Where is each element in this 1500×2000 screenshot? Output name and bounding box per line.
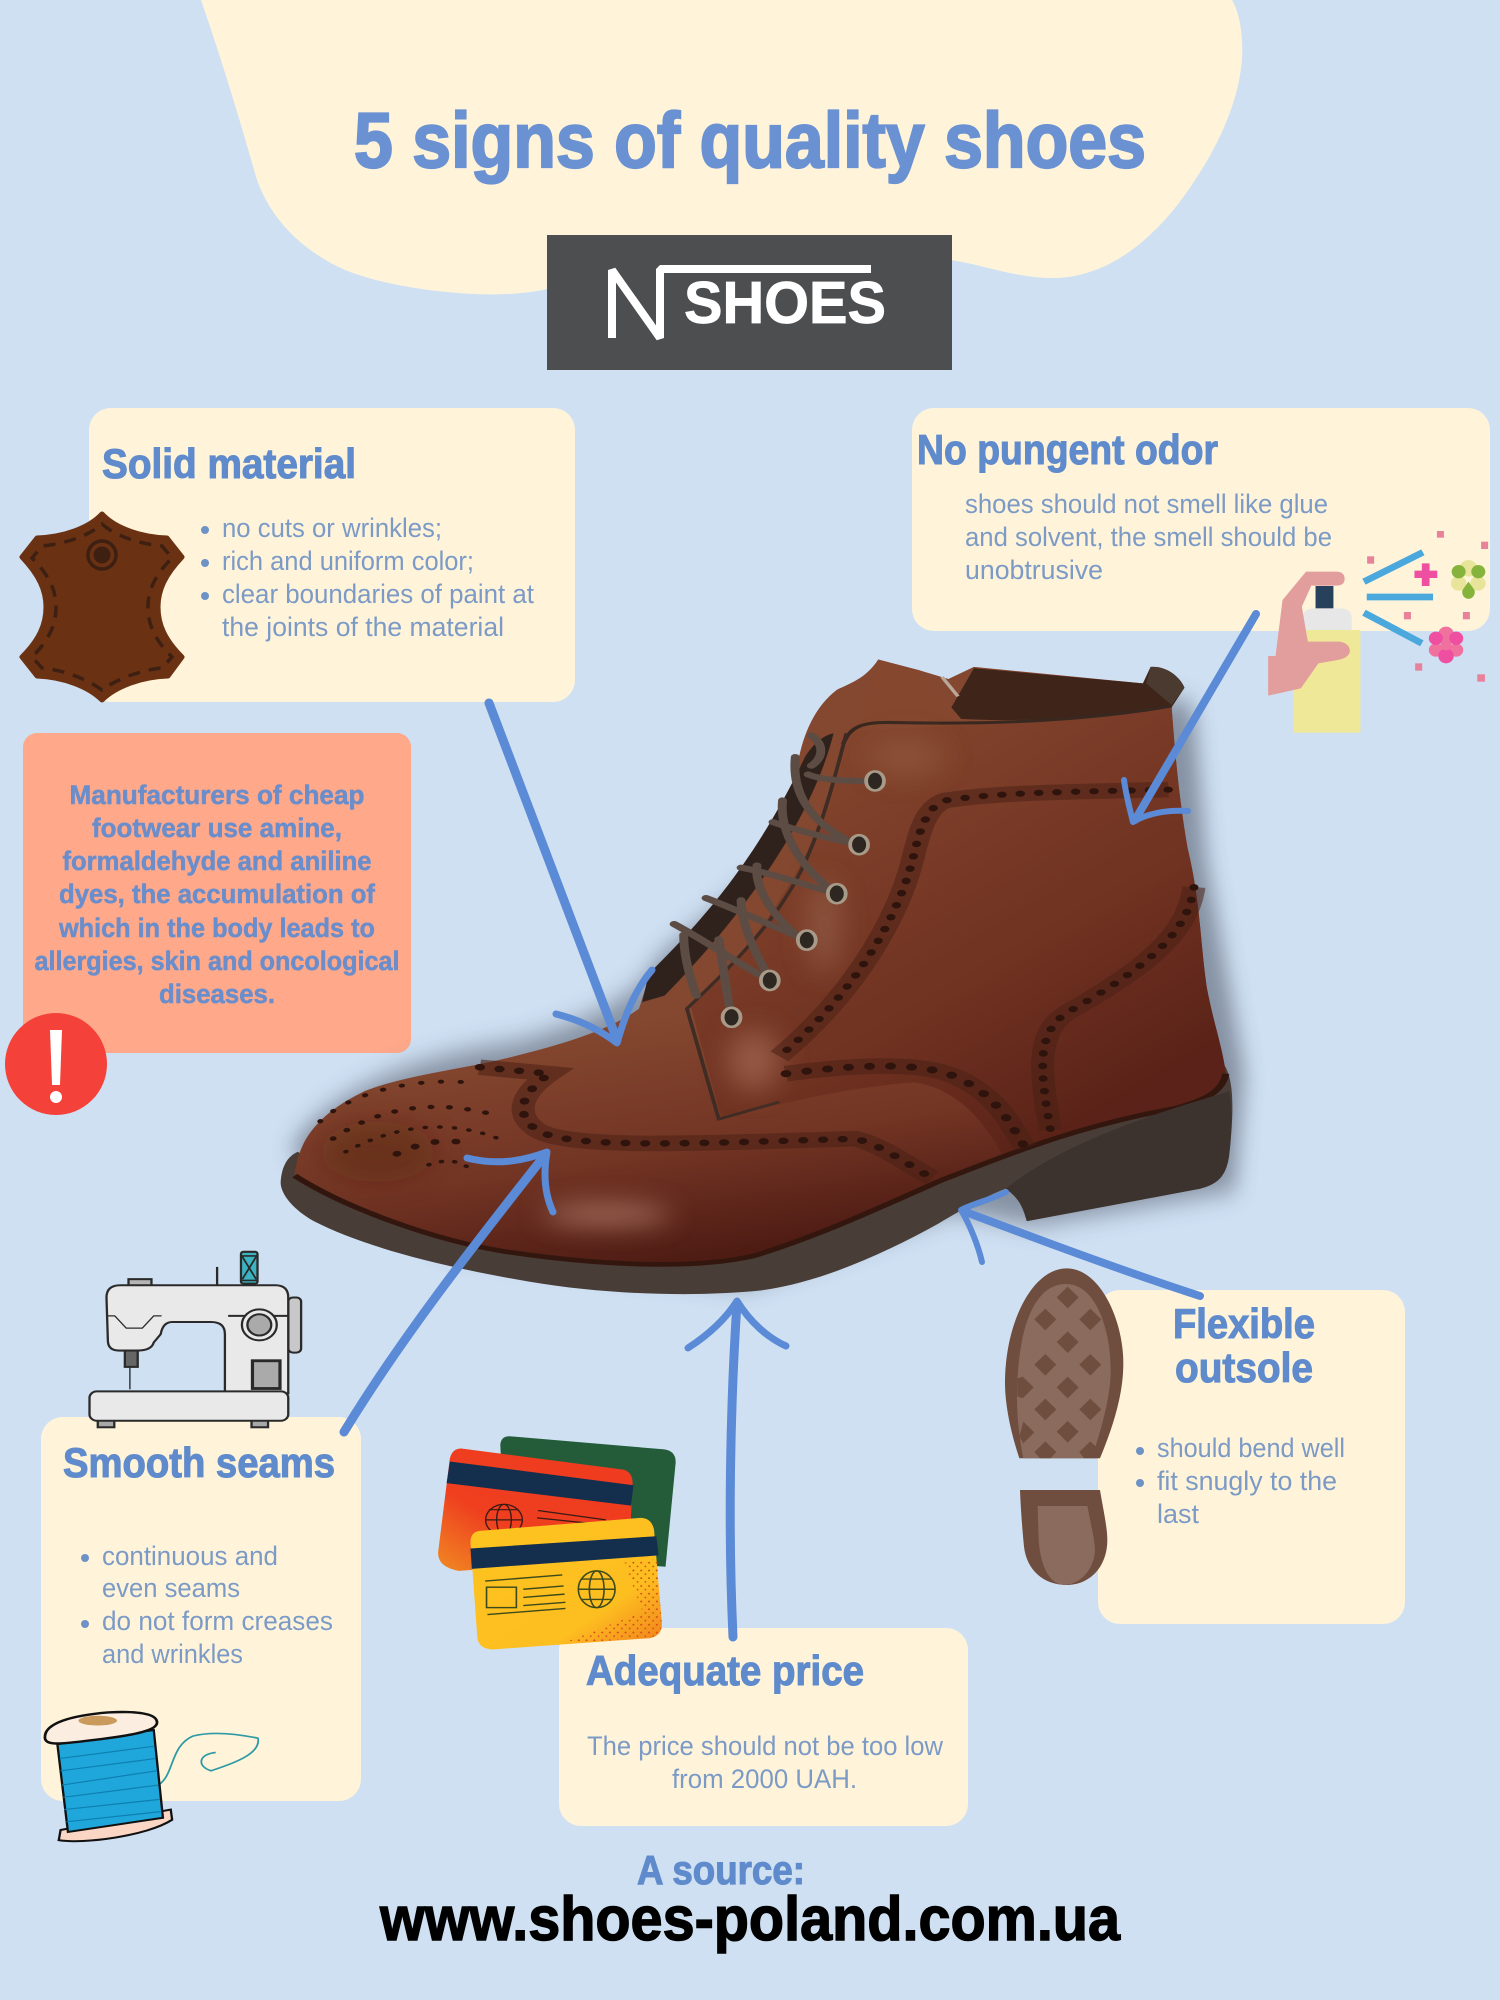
- list: smooth seams: even seams: [102, 1573, 240, 1603]
- list: smooth seams: do not form creases: [102, 1606, 333, 1636]
- heading: no pungent odor: No pungent odor: [917, 426, 1218, 473]
- text: price: from 2000 UAH.: [672, 1764, 857, 1794]
- text: odor: and solvent, the smell should be: [965, 522, 1332, 552]
- list: outsole: should bend well: [1157, 1433, 1345, 1463]
- brogue bands: [480, 790, 1194, 1178]
- arrow: solid material: [489, 703, 652, 1043]
- collar interior: [945, 667, 1184, 720]
- laces: [674, 735, 875, 1017]
- heading: adequate price: Adequate price: [586, 1647, 864, 1694]
- sole: [281, 1063, 1232, 1294]
- panel: warning: Manufacturers of cheap: [70, 780, 364, 810]
- list: solid material: clear boundaries of paint at: [222, 579, 534, 609]
- title blob: [201, 0, 1242, 294]
- heading: flexible outsole: outsole: [1175, 1344, 1313, 1391]
- list: smooth seams: continuous and: [102, 1541, 278, 1571]
- panel: warning: which in the body leads to: [58, 913, 375, 943]
- icon: spray bottle: [1268, 531, 1488, 733]
- title: 5 signs of quality shoes: [354, 96, 1146, 184]
- list: smooth seams: [81, 1541, 333, 1669]
- list: outsole: [1136, 1433, 1345, 1529]
- panel: smooth seams: [41, 1417, 361, 1801]
- heading: flexible outsole: Flexible: [1173, 1300, 1315, 1347]
- heel: [1006, 1091, 1231, 1221]
- shaft panel: [690, 707, 1226, 1156]
- arrow: smooth seams: [344, 1152, 553, 1432]
- list: outsole: last: [1157, 1499, 1199, 1529]
- footer source label: A source:: [637, 1847, 805, 1893]
- welt: [295, 1074, 1226, 1264]
- list: solid material: [201, 513, 534, 642]
- arrow: no pungent odor: [1124, 614, 1256, 822]
- text: odor: [965, 489, 1332, 585]
- heading: smooth seams: Smooth seams: [63, 1439, 335, 1486]
- list: smooth seams: and wrinkles: [102, 1639, 243, 1669]
- panel: warning: dyes, the accumulation of: [59, 879, 376, 909]
- list: solid material: no cuts or wrinkles;: [222, 513, 442, 543]
- highlights: [320, 738, 945, 1224]
- arrow: adequate price: [688, 1301, 786, 1637]
- icon: exclamation: [5, 1013, 107, 1115]
- icon: shoe sole: [1005, 1268, 1123, 1585]
- shoe: [281, 660, 1245, 1294]
- eyelets: [723, 771, 884, 1027]
- collar edge: [843, 706, 1172, 744]
- icon: leather hide: [22, 514, 182, 700]
- panel: adequate price: [559, 1628, 968, 1826]
- footer url: www.shoes-poland.com.ua: [379, 1885, 1120, 1954]
- text: price: The price should not be too low: [587, 1731, 943, 1761]
- tongue flap: [856, 660, 961, 727]
- panel: warning: footwear use amine,: [92, 813, 342, 843]
- eye stay edge: [687, 733, 846, 1119]
- panel: flexible outsole: [1098, 1290, 1405, 1624]
- arrow: flexible outsole: [961, 1192, 1200, 1296]
- icon: sewing machine: [90, 1252, 301, 1427]
- text: odor: unobtrusive: [965, 555, 1103, 585]
- logo: SHOES: [684, 270, 886, 336]
- logo: [547, 235, 952, 370]
- panel: warning: allergies, skin and oncological: [34, 946, 400, 976]
- panel: warning: [23, 733, 411, 1053]
- heading: solid material: Solid material: [102, 440, 356, 487]
- panel: no pungent odor: [912, 408, 1490, 631]
- icon: thread spool: [45, 1712, 258, 1841]
- lace gap: [642, 733, 834, 1002]
- panel: warning: diseases.: [159, 979, 275, 1009]
- text: price: [587, 1731, 943, 1794]
- upper: [295, 660, 1226, 1264]
- panel: solid material: [89, 408, 575, 702]
- brogue perforations: [320, 790, 1194, 1178]
- icon: credit cards: [438, 1436, 676, 1649]
- list: solid material: rich and uniform color;: [222, 546, 474, 576]
- panel: warning: formaldehyde and aniline: [62, 846, 372, 876]
- list: outsole: fit snugly to the: [1157, 1466, 1337, 1496]
- text: odor: shoes should not smell like glue: [965, 489, 1328, 519]
- list: solid material: the joints of the material: [222, 612, 504, 642]
- heading: flexible outsole: [1173, 1300, 1315, 1391]
